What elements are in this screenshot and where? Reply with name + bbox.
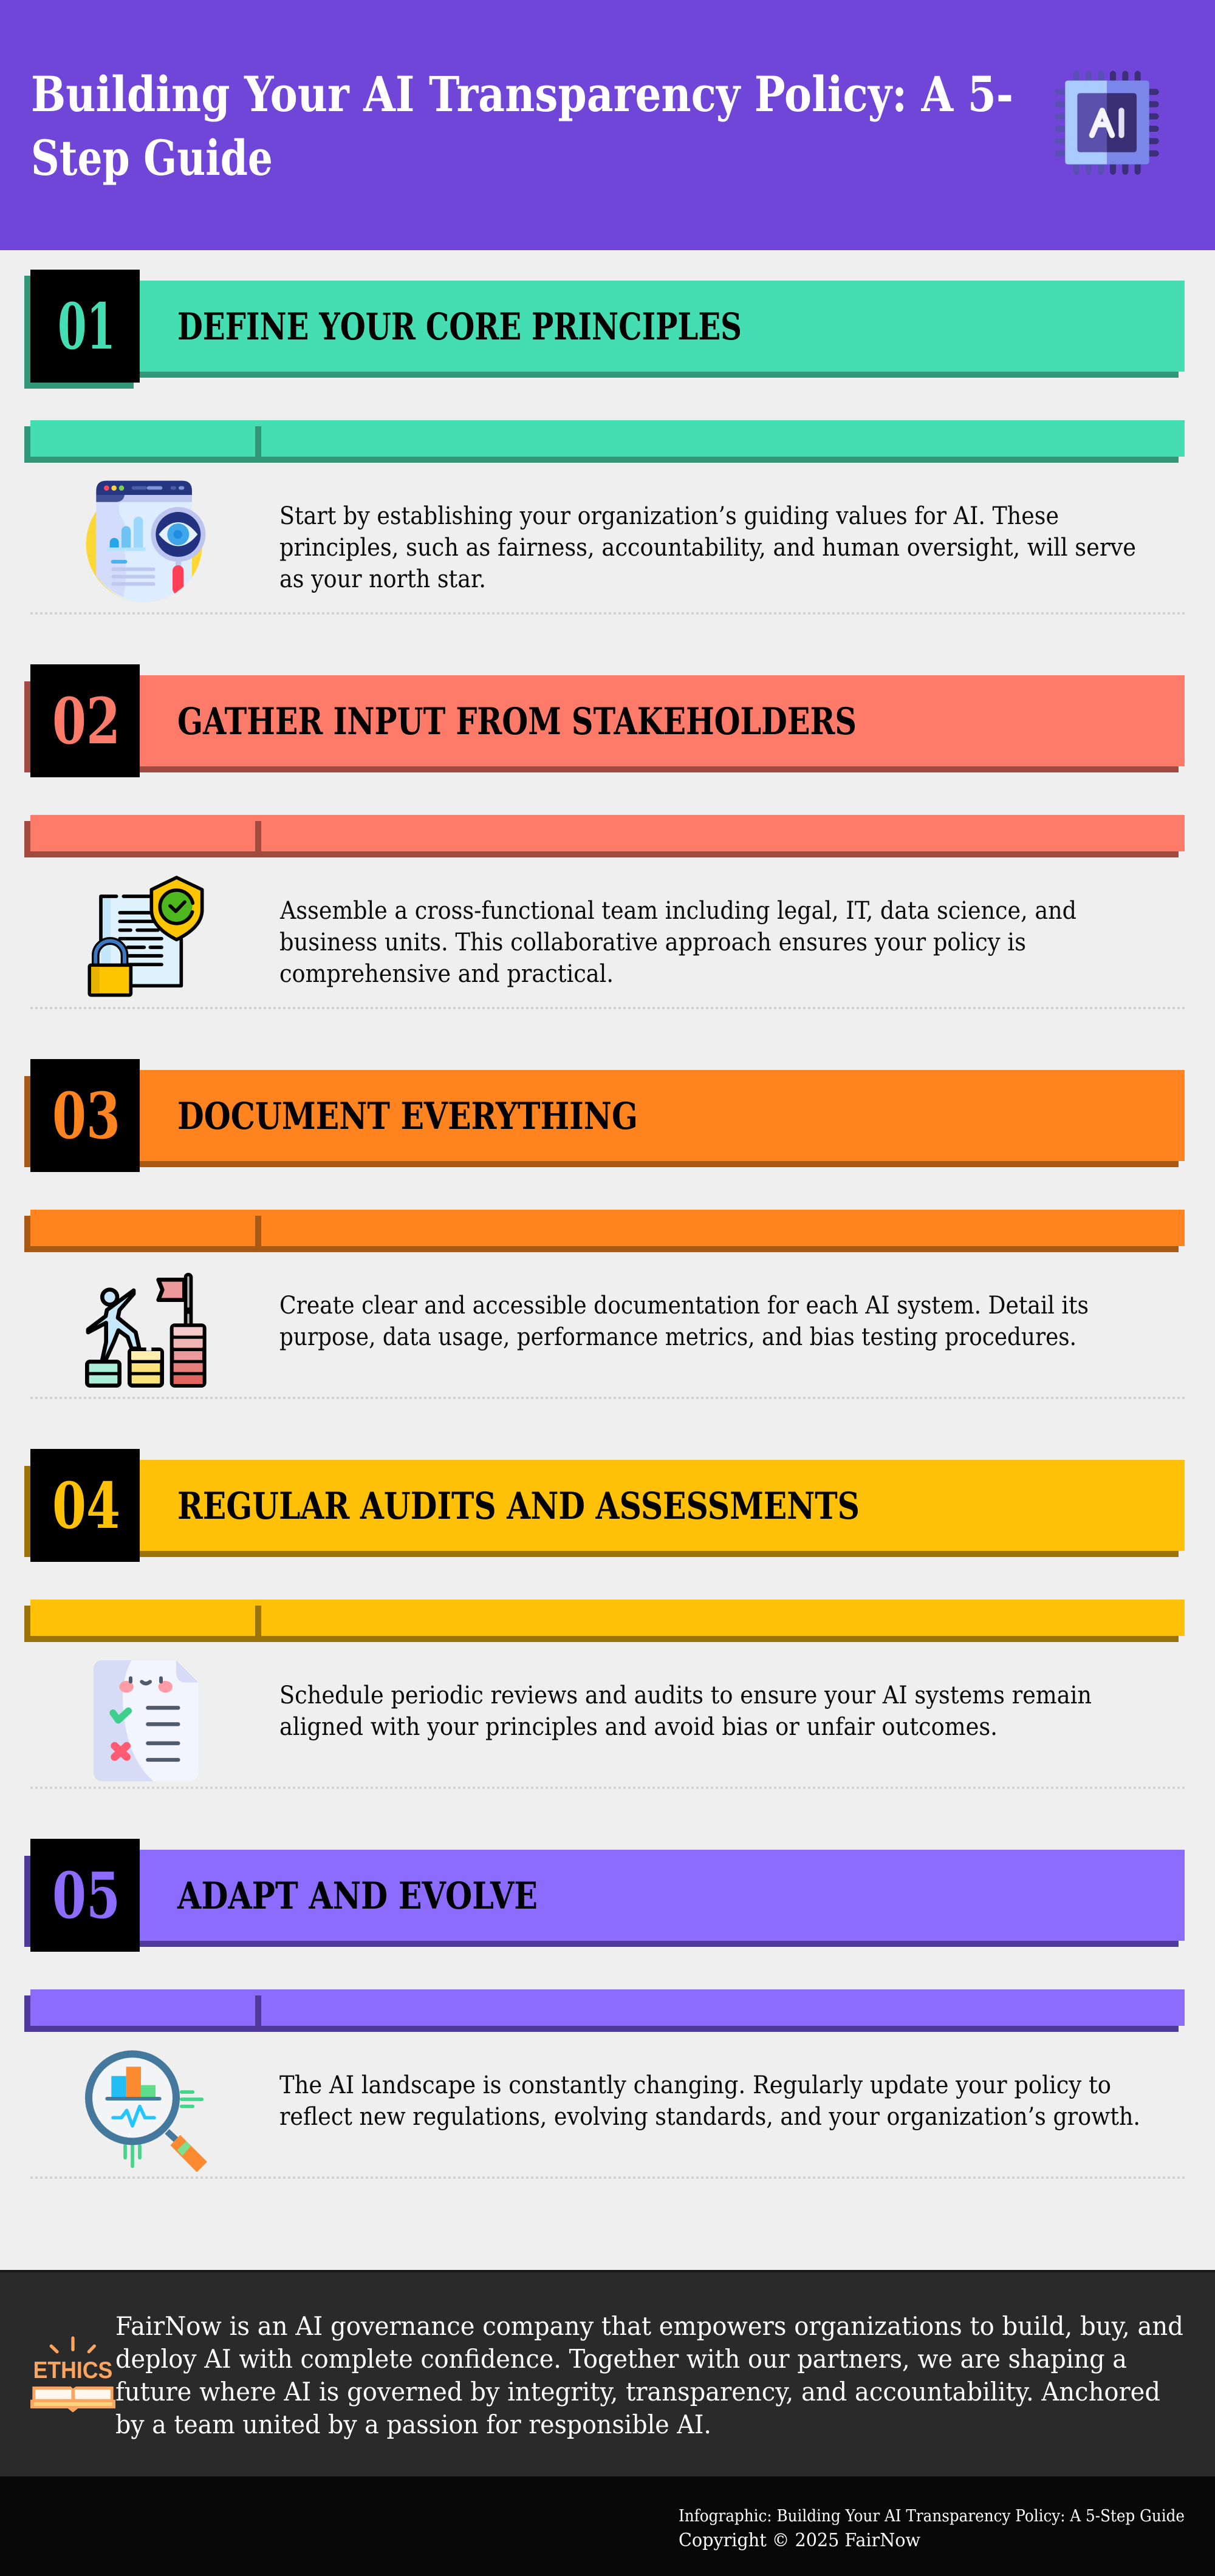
footer credits (679, 2507, 1185, 2551)
step 01 text: as your north star. (279, 565, 486, 593)
step 01: define your core principles (24, 270, 1185, 613)
icon: figure climbing stacks toward flag (87, 1277, 204, 1386)
step 04 header bar (24, 1449, 1185, 1562)
footer credits: Copyright © 2025 FairNow (679, 2530, 920, 2551)
step 04 text (279, 1682, 1092, 1741)
about text: by a team united by a passion for responsible AI. (115, 2410, 711, 2439)
step 05 header bar: 05 (52, 1858, 120, 1933)
step 01 text: principles, such as fairness, accountability, and human oversight, will serve (279, 534, 1136, 562)
step 03 header bar: 03 (52, 1078, 120, 1153)
icon: ethics book (30, 2338, 115, 2413)
step 02: gather input from stakeholders (24, 664, 1185, 1008)
step 03 text (279, 1292, 1089, 1351)
step 02 text: business units. This collaborative approach ensures your policy is (279, 929, 1026, 956)
step 03 header bar (24, 1059, 1185, 1172)
step 05: adapt and evolve (24, 1839, 1185, 2178)
step 02 text: comprehensive and practical. (279, 960, 614, 988)
step 03 text: Create clear and accessible documentation for each AI system. Detail its (279, 1292, 1089, 1320)
step 02 header bar: GATHER INPUT FROM STAKEHOLDERS (177, 700, 857, 743)
about text (115, 2311, 1183, 2439)
step 05 text (279, 2071, 1140, 2131)
step 01 text: Start by establishing your organization’s guiding values for AI. These (279, 502, 1059, 530)
step 03 text: purpose, data usage, performance metrics, and bias testing procedures. (279, 1323, 1076, 1351)
about panel (0, 2270, 1215, 2476)
step 01 header bar: DEFINE YOUR CORE PRINCIPLES (177, 305, 742, 349)
icon: report with eye magnifier (86, 481, 205, 602)
about text: deploy AI with complete confidence. Together with our partners, we are shaping a (115, 2344, 1127, 2374)
step 05 colour band (24, 1989, 1185, 2032)
icon: smiling checklist document (94, 1660, 199, 1781)
step 01 colour band (24, 420, 1185, 463)
step 04 text: aligned with your principles and avoid bias or unfair outcomes. (279, 1713, 998, 1741)
step 02 colour band (24, 815, 1185, 857)
step 02 header bar (24, 664, 1185, 777)
icon: magnifier over charts (89, 2054, 207, 2172)
icon: document with shield and padlock (89, 877, 202, 995)
step 03 colour band (24, 1210, 1185, 1252)
step 04 colour band (24, 1600, 1185, 1642)
step 01 header bar (24, 270, 1185, 389)
step 04 header bar: 04 (52, 1468, 120, 1543)
step 04: regular audits and assessments (24, 1449, 1185, 1788)
icon: ethics book: ETHICS (33, 2357, 112, 2383)
step 03: document everything (24, 1059, 1185, 1398)
step 05 header bar: ADAPT AND EVOLVE (177, 1875, 538, 1918)
step 04 header bar: REGULAR AUDITS AND ASSESSMENTS (177, 1485, 860, 1528)
step 02 header bar: 02 (52, 684, 120, 758)
about text: FairNow is an AI governance company that empowers organizations to build, buy, and (115, 2311, 1183, 2341)
step 04 text: Schedule periodic reviews and audits to ensure your AI systems remain (279, 1682, 1092, 1709)
step 01 header bar: 01 (58, 289, 115, 364)
step 02 text (279, 897, 1076, 988)
title: Building Your AI Transparency Policy: A 5- (31, 66, 1013, 123)
title (31, 66, 1013, 186)
step 02 text: Assemble a cross-functional team including legal, IT, data science, and (279, 897, 1076, 925)
step 05 header bar (24, 1839, 1185, 1952)
step 05 text: reflect new regulations, evolving standards, and your organization’s growth. (279, 2103, 1140, 2131)
icon: AI chip (1058, 74, 1156, 172)
step 01 text (279, 502, 1136, 593)
title: Step Guide (31, 129, 273, 186)
header panel (0, 0, 1215, 250)
footer panel (0, 2476, 1215, 2576)
about text: future where AI is governed by integrity, transparency, and accountability. Anchored (115, 2377, 1160, 2407)
step 05 text: The AI landscape is constantly changing. Regularly update your policy to (279, 2071, 1111, 2099)
step 03 header bar: DOCUMENT EVERYTHING (177, 1095, 638, 1138)
